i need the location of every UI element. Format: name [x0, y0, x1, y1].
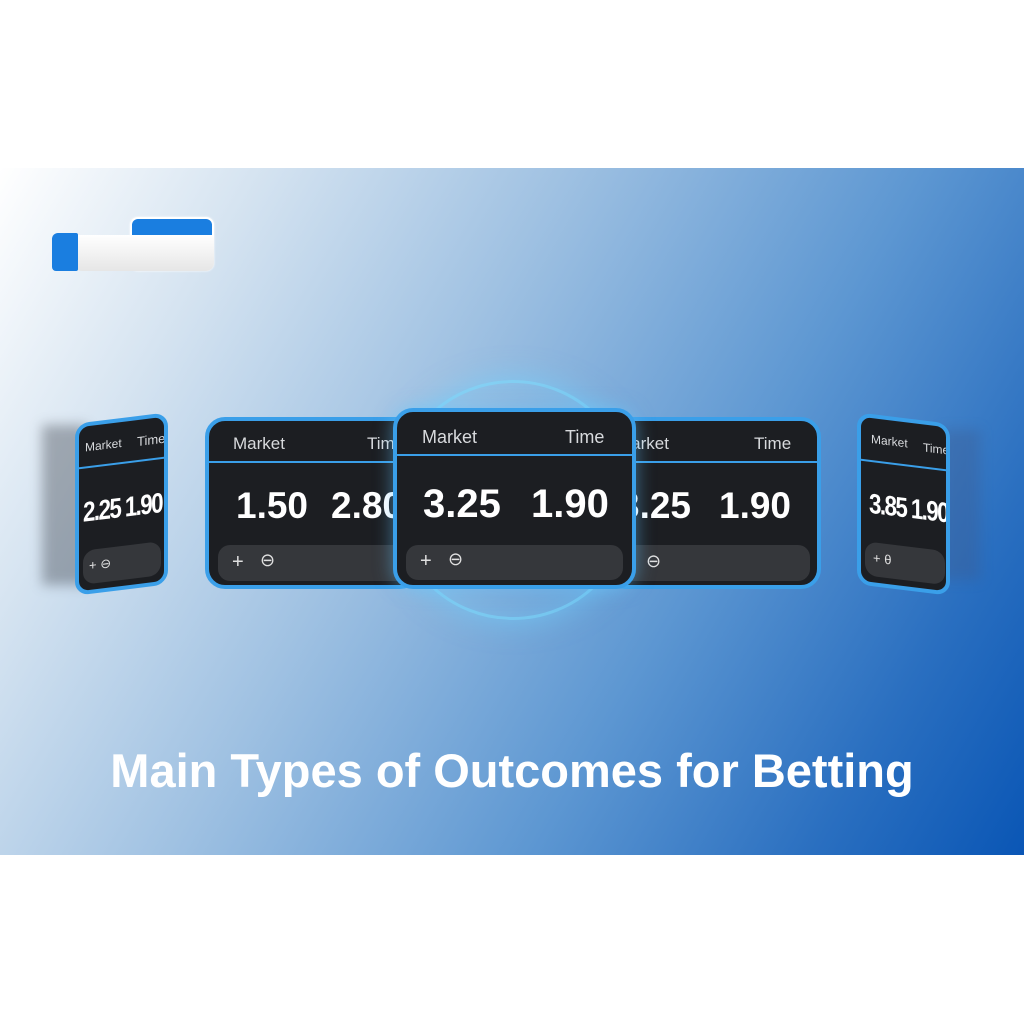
title: Main Types of Outcomes for Betting	[110, 744, 914, 797]
card: right: ⊖	[646, 551, 661, 571]
card: center: ⊖	[448, 549, 463, 569]
glow ring	[393, 380, 633, 620]
card: far right: + θ	[873, 550, 891, 568]
card: far left: Time	[137, 431, 165, 449]
card: left: 2.80	[331, 485, 403, 526]
card: center: +	[420, 550, 432, 572]
card: far right: Time	[923, 440, 949, 458]
card: right: Market	[617, 434, 669, 453]
card: left: Time	[367, 434, 404, 453]
card: right	[605, 417, 821, 589]
card: left: 1.50	[236, 485, 308, 526]
card: right: 1.90	[719, 485, 791, 526]
ghost blur left	[42, 425, 87, 585]
card: far left: 2.25 1.90	[83, 487, 162, 528]
ghost blur right	[940, 430, 980, 580]
card: far left	[75, 412, 168, 596]
card: center	[393, 408, 636, 589]
card: center: Market	[422, 427, 477, 447]
card: center: Time	[565, 427, 604, 447]
card: center: 3.25	[423, 482, 501, 526]
card: right: Time	[754, 434, 791, 453]
card: center: 1.90	[531, 482, 609, 526]
card: far left: Market	[85, 436, 122, 454]
background band	[0, 168, 1024, 855]
card: far right: 3.85 1.90	[869, 488, 948, 528]
card: left: Market	[233, 434, 285, 453]
card: left: +	[232, 551, 244, 573]
card: left: ⊖	[260, 550, 275, 570]
card: far right	[857, 412, 950, 596]
card: far right: Market	[871, 432, 908, 451]
card: right: 3.25	[619, 485, 691, 526]
card: far left: + ⊖	[89, 555, 111, 573]
logo	[52, 216, 215, 272]
card: left	[205, 417, 420, 589]
